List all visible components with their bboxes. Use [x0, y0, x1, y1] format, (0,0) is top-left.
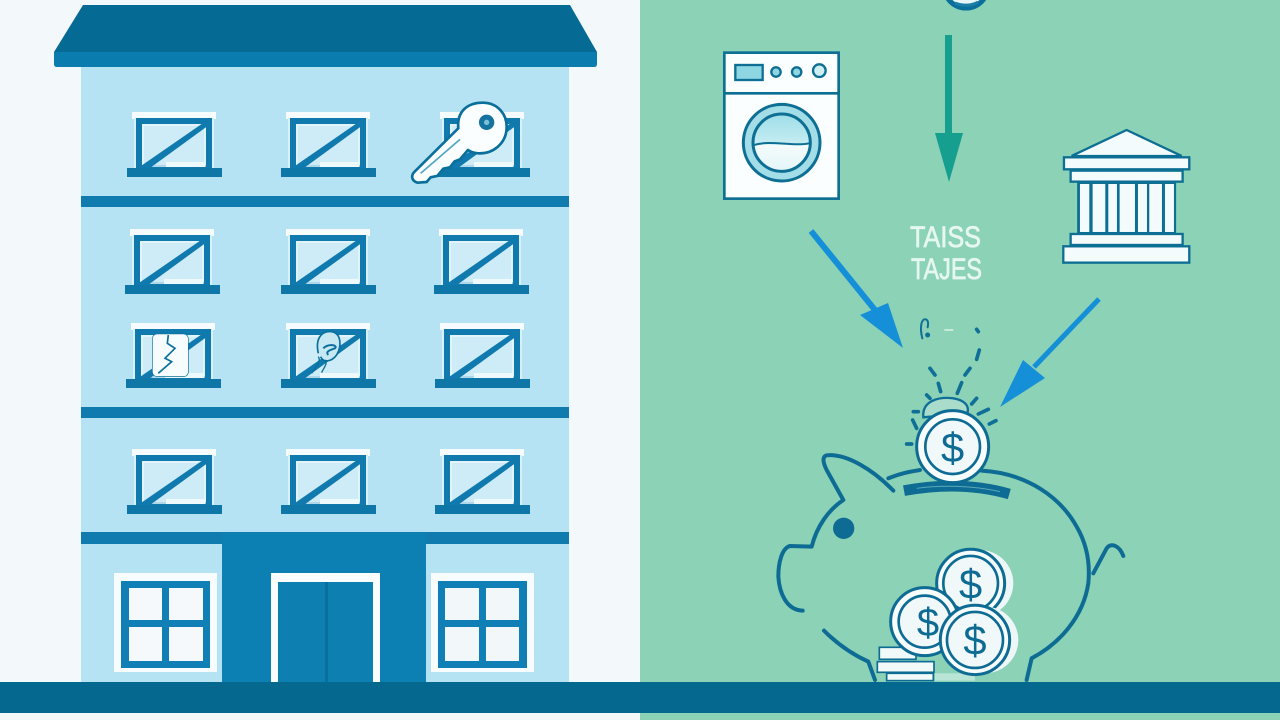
label: taxes text: TAJES	[911, 253, 982, 286]
coin front: $	[963, 617, 987, 664]
entrance block	[222, 533, 426, 683]
coin entering slot	[917, 411, 989, 483]
label: taxes text: TAISS	[910, 221, 981, 254]
piggy bank	[778, 319, 1123, 681]
icon: coin at top edge	[944, 0, 988, 8]
coin entering slot: $	[941, 424, 964, 471]
bill stack	[877, 647, 975, 681]
ground bar overlap	[760, 682, 1140, 713]
coin back	[937, 549, 1013, 617]
coin slot	[904, 486, 1009, 494]
floor bands	[81, 196, 569, 544]
icon: bank building	[1063, 130, 1189, 263]
coin back: $	[959, 561, 982, 608]
arrow: green down arrow	[935, 35, 963, 182]
panel: right background	[640, 0, 1280, 720]
upper windows	[125, 112, 530, 514]
pig eye	[833, 518, 854, 539]
building facade	[81, 66, 569, 684]
falling coin trail	[907, 319, 996, 444]
panel: left background	[0, 0, 640, 720]
ground bar	[0, 682, 1280, 713]
coin left: $	[917, 601, 939, 645]
icon: cracked panel in window	[152, 334, 188, 377]
arrow: blue arrow from bank	[1000, 299, 1099, 407]
building	[54, 5, 597, 684]
icon: washing machine	[724, 53, 839, 199]
coin left	[891, 588, 959, 656]
coin front	[940, 605, 1018, 675]
entrance door	[271, 573, 380, 683]
icon: key	[412, 103, 507, 183]
ground floor right window	[431, 573, 534, 672]
roof	[54, 5, 597, 67]
pig outline	[778, 455, 1123, 680]
arrow: blue arrow from washing machine	[811, 231, 903, 348]
label: taxes text	[910, 221, 982, 286]
icon: scribble in window	[312, 332, 340, 373]
ground floor left window	[114, 573, 217, 672]
